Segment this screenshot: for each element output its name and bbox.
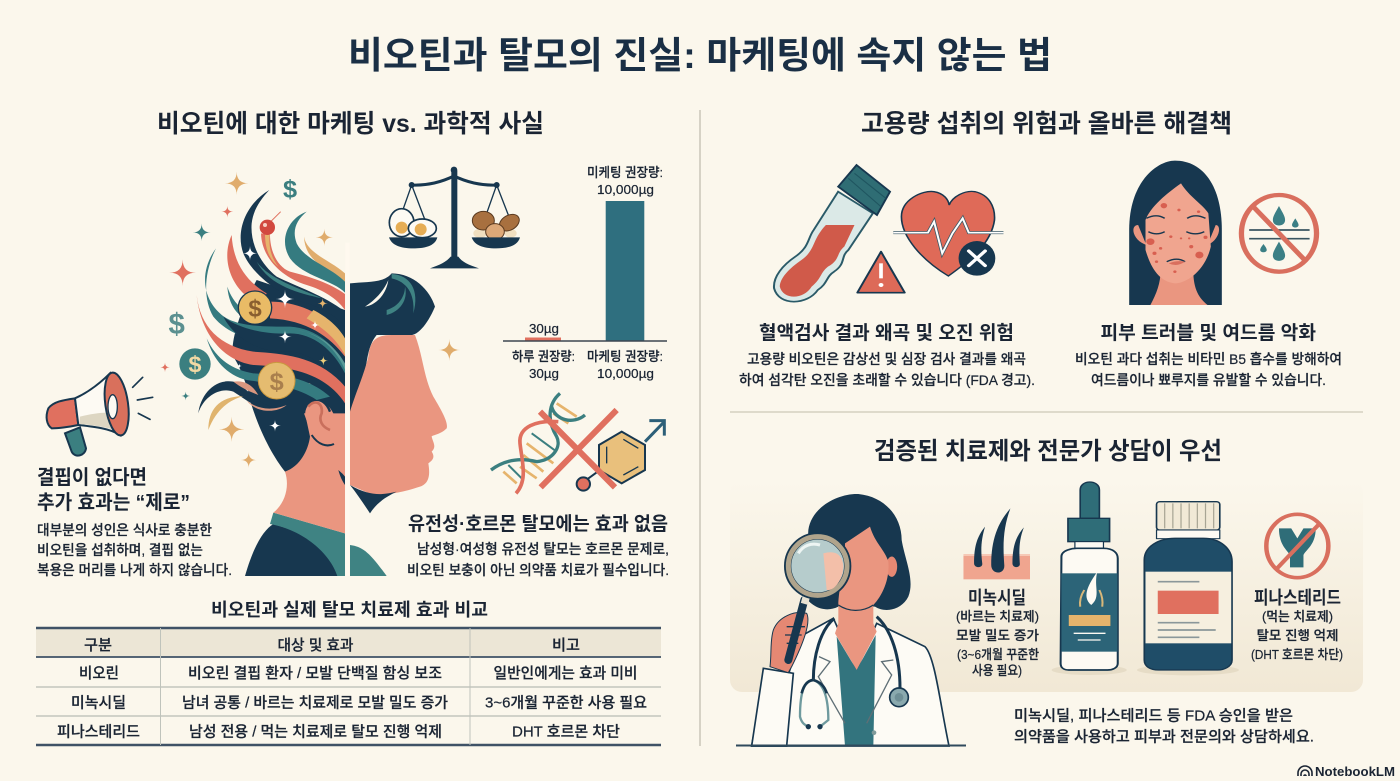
icon: crossed out DNA and hormone <box>491 393 664 493</box>
heading: marketing vs science: 비오틴에 대한 마케팅 vs. 과학적 사실 <box>157 110 544 138</box>
bar chart: daily vs marketing dose <box>503 165 667 381</box>
illustration: head with marketing hair: $ <box>283 175 297 203</box>
icon: megaphone <box>47 371 153 456</box>
illustration: head with marketing hair: $ <box>189 352 202 378</box>
text block: skin trouble: 피부 트러블 및 여드름 악화 <box>1100 322 1316 344</box>
text block: consult a dermatologist: 미녹시딜, 피나스테리드 등 FDA 승인을 받은 <box>1014 708 1293 724</box>
comparison table: 피나스테리드 <box>57 724 140 740</box>
icon: balance scale with eggs and nuts <box>389 167 522 268</box>
comparison table <box>36 600 661 745</box>
bar chart: daily vs marketing dose: 30µg <box>529 366 559 381</box>
logo: NotebookLM: NotebookLM <box>1315 764 1395 779</box>
text block: skin trouble <box>1075 322 1342 388</box>
heading: verified treatments: 검증된 치료제와 전문가 상담이 우선 <box>874 438 1222 465</box>
icon: pill bottle <box>1137 502 1239 675</box>
text block: no extra effect: 비오틴을 섭취하며, 결핍 없는 <box>37 542 203 558</box>
text block: finasteride: (DHT 호르몬 차단) <box>1251 647 1343 662</box>
icon: dropper bottle <box>1052 482 1127 675</box>
icon: blocked DHT <box>1266 514 1328 578</box>
text block: consult a dermatologist <box>1014 708 1314 746</box>
text block: no effect on hereditary hair loss: 비오틴 보충이 아닌 의약품 치료가 필수입니다. <box>407 562 669 578</box>
comparison table: 대상 및 효과 <box>278 637 354 654</box>
text block: consult a dermatologist: 의약품을 사용하고 피부과 전문의와 상담하세요. <box>1014 728 1314 746</box>
text block: blood test distortion: 고용량 비오틴은 감상선 및 심장 검사 결과를 왜곡 <box>747 351 1026 367</box>
text block: skin trouble: 비오틴 과다 섭취는 비타민 B5 흡수를 방해하여 <box>1075 351 1342 367</box>
text block: blood test distortion: 하여 섬각탄 오진을 초래할 수 있습니다 (FDA 경고). <box>739 372 1035 388</box>
illustration: head with marketing hair: $ <box>248 296 262 323</box>
bar chart: daily vs marketing dose: 미케팅 권장량: <box>587 165 663 180</box>
text block: no extra effect: 복용은 머리를 나게 하지 않습니다. <box>37 562 232 578</box>
text block: no extra effect <box>37 466 232 578</box>
text block: no effect on hereditary hair loss: 남성형·여성형 유전성 탈모는 호르몬 문제로, <box>417 541 669 557</box>
comparison table: 비오린 <box>79 665 119 682</box>
comparison table: DHT 호르몬 차단 <box>512 724 620 740</box>
comparison table: 구분 <box>84 637 112 654</box>
comparison table: 3~6개월 꾸준한 사용 필요 <box>485 694 647 712</box>
icon: test tube, heart, warning <box>774 165 1003 302</box>
illustration: head with marketing hair: $ <box>270 368 284 396</box>
text block: minoxidil: 미녹시딜 <box>968 588 1026 608</box>
text block: minoxidil: (3~6개월 꾸준한 <box>957 647 1039 662</box>
table title: 비오틴과 실제 탈모 치료제 효과 비교 <box>211 600 488 620</box>
text block: no extra effect: 추가 효과는 “제로” <box>37 491 190 514</box>
text block: finasteride: (먹는 치료제) <box>1262 609 1333 624</box>
comparison table: 남성 전용 / 먹는 치료제로 탈모 진행 억제 <box>189 724 442 740</box>
bar chart: daily vs marketing dose: 10,000µg <box>597 366 654 381</box>
text block: minoxidil: 사용 필요) <box>972 663 1022 678</box>
title: 비오틴과 탈모의 진실: 마케팅에 속지 않는 법 <box>348 35 1052 76</box>
icon: woman with acne and no-water symbol <box>1129 161 1317 305</box>
text block: skin trouble: 여드름이나 뾰루지를 유발할 수 있습니다. <box>1091 372 1326 388</box>
ground line under doctor <box>736 744 966 746</box>
comparison table: 남녀 공통 / 바르는 치료제로 모발 밀도 증가 <box>182 694 448 712</box>
comparison table: 미녹시딜 <box>71 694 126 712</box>
text block: no effect on hereditary hair loss: 유전성·호르몬 탈모에는 효과 없음 <box>408 513 668 535</box>
text block: minoxidil: (바르는 치료제) <box>956 609 1039 624</box>
illustration: head with marketing hair <box>160 172 460 576</box>
text block: no effect on hereditary hair loss <box>407 513 669 578</box>
text block: no extra effect: 대부분의 성인은 식사로 충분한 <box>37 522 212 538</box>
icon: hair follicles <box>963 508 1030 579</box>
bar chart: daily vs marketing dose: 하루 권장량: <box>512 349 575 364</box>
text block: finasteride: 피나스테리드 <box>1254 588 1341 608</box>
heading: high dose risks: 고용량 섭취의 위험과 올바른 해결책 <box>861 110 1232 138</box>
illustration: head with marketing hair: $ <box>169 308 185 341</box>
comparison table: 비고 <box>552 637 580 654</box>
text block: finasteride <box>1251 588 1343 662</box>
panel: treatments background <box>730 480 1363 692</box>
text block: minoxidil <box>956 588 1039 678</box>
bar chart: daily vs marketing dose: 10,000µg <box>597 182 654 197</box>
bar chart: daily vs marketing dose: 30µg <box>529 321 559 336</box>
comparison table: 일반인에게는 효과 미비 <box>494 665 638 682</box>
text block: minoxidil: 모발 밀도 증가 <box>956 628 1039 643</box>
text block: no extra effect: 결핍이 없다면 <box>37 466 147 489</box>
bar chart: daily vs marketing dose: 마케팅 권장량: <box>587 349 663 364</box>
text block: finasteride: 탈모 진행 억제 <box>1256 628 1338 643</box>
comparison table: 비오린 결핍 환자 / 모발 단백질 함싱 보조 <box>188 665 442 682</box>
text block: blood test distortion <box>739 322 1035 388</box>
text block: blood test distortion: 혈액검사 결과 왜곡 및 오진 위험 <box>759 322 1014 344</box>
illustration: doctor with magnifier <box>752 494 949 746</box>
